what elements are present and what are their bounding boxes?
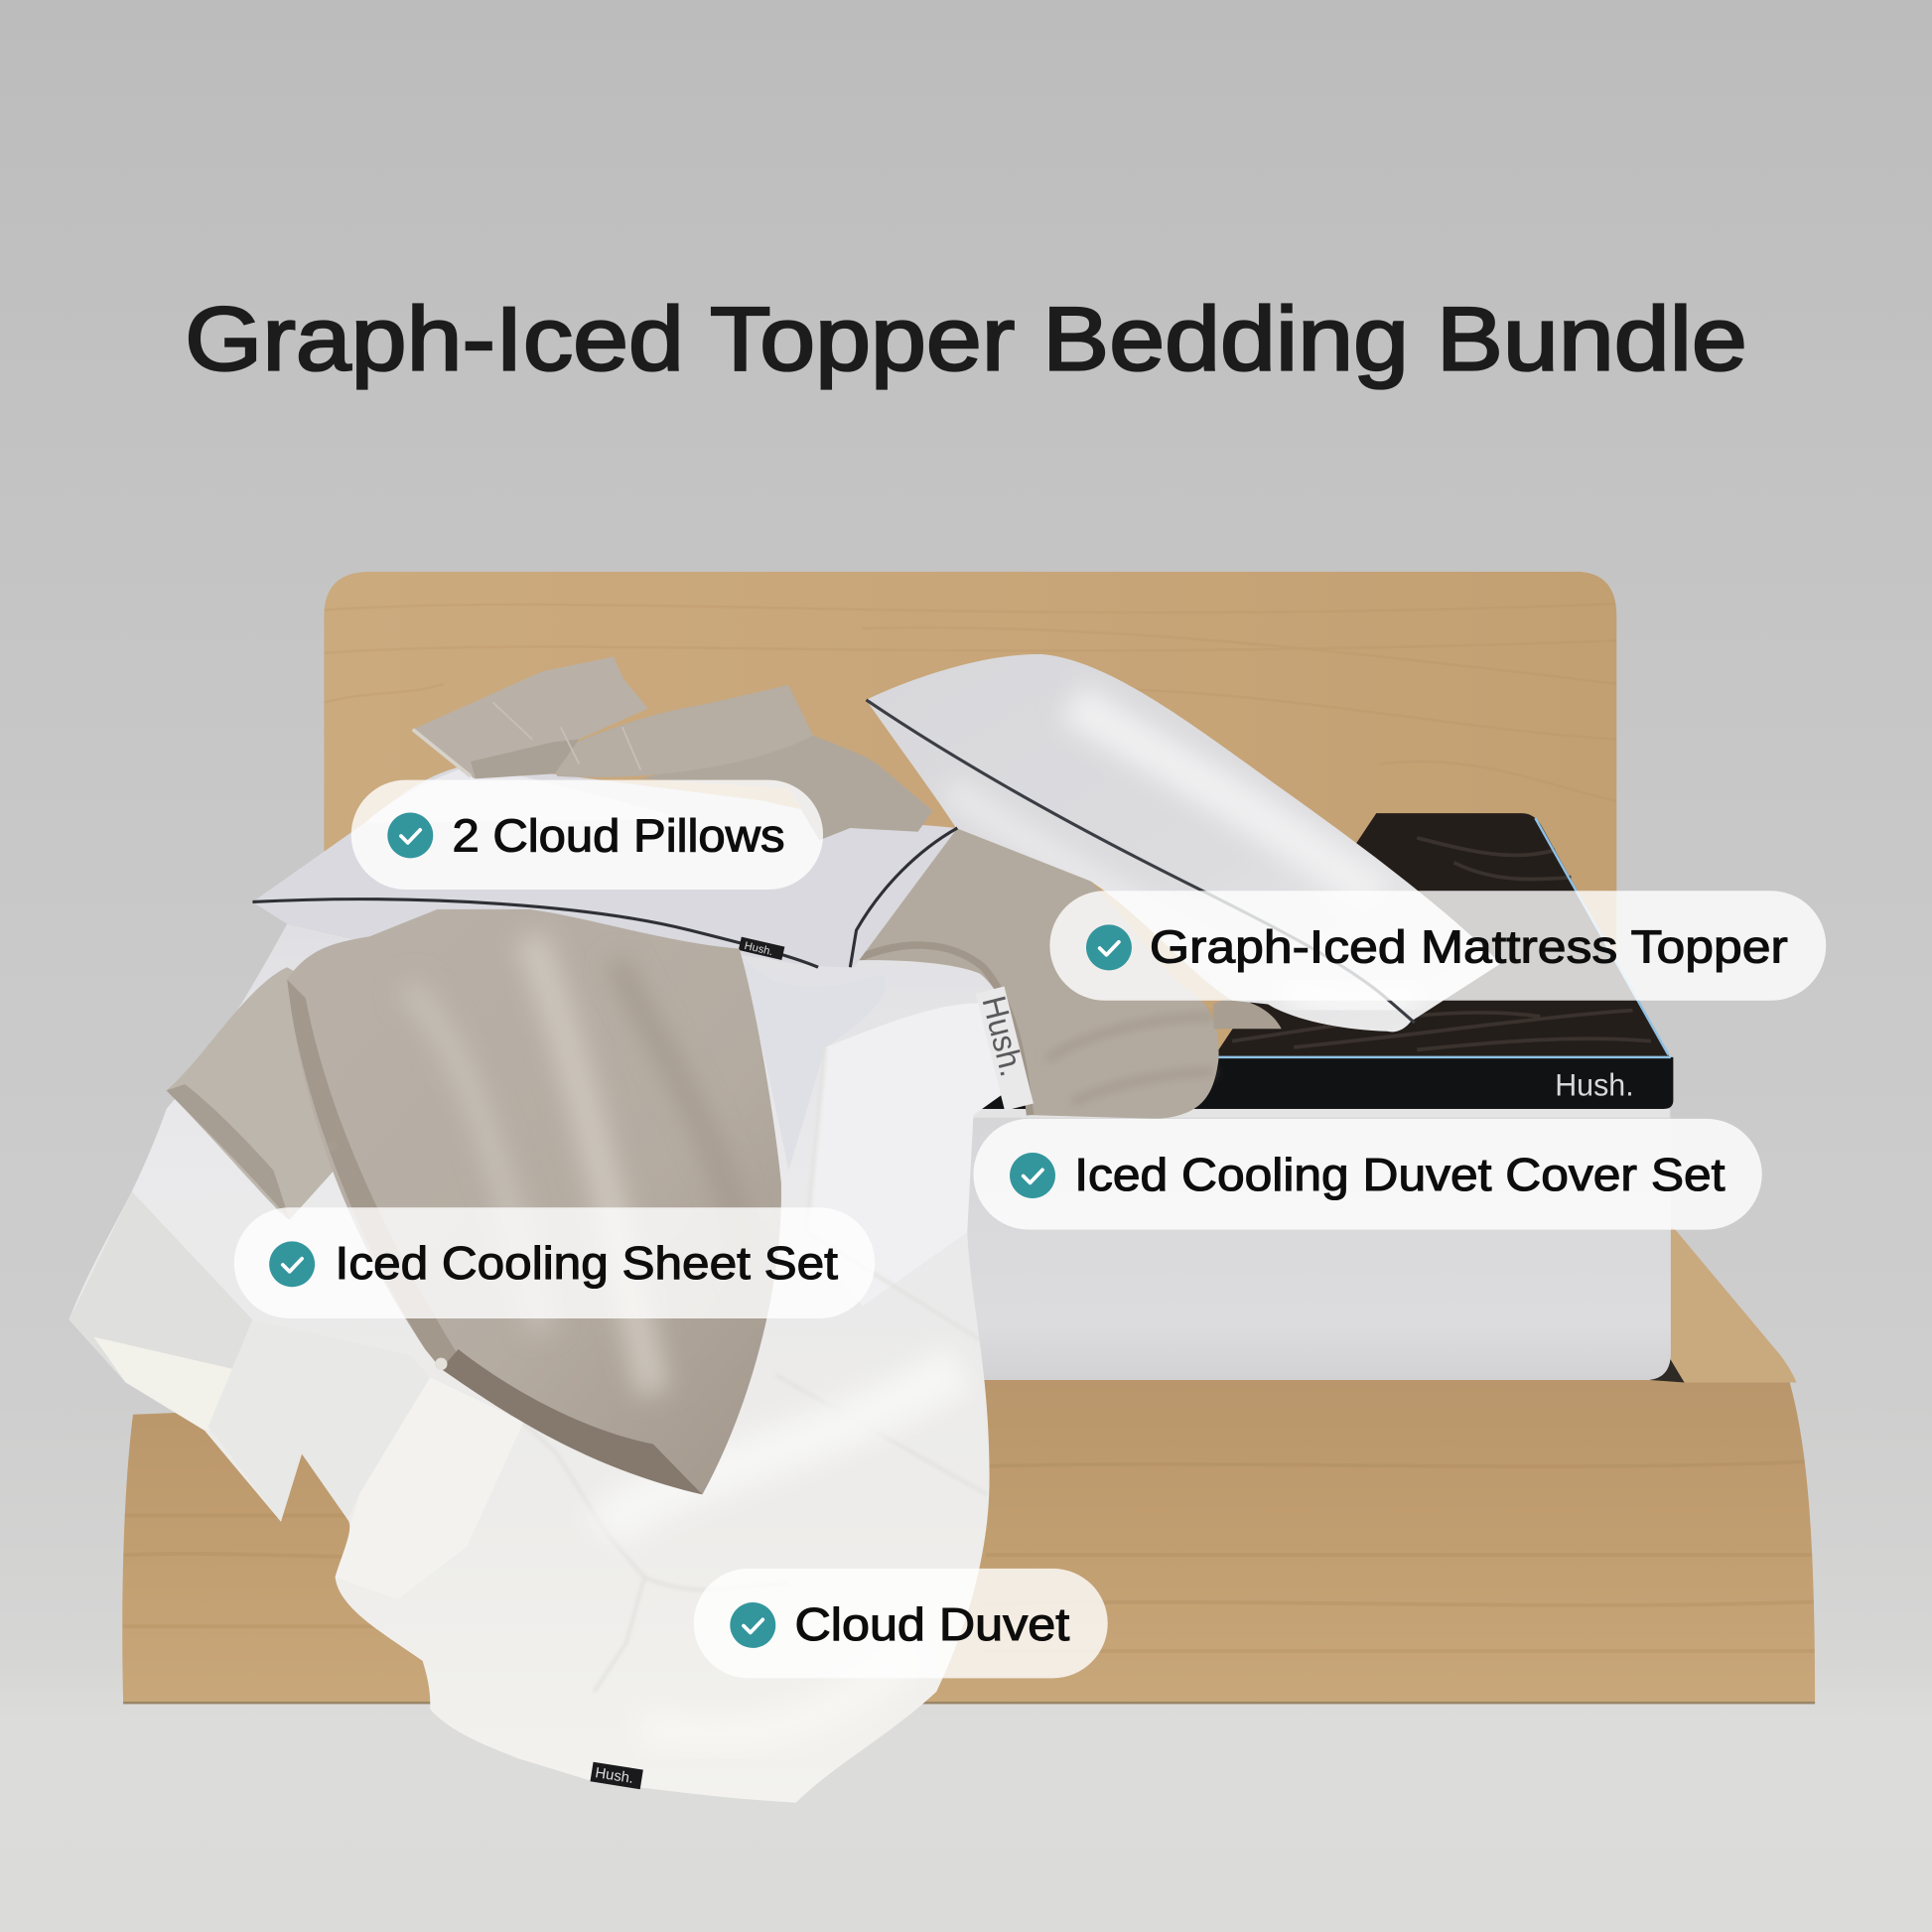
fitted sheet label tag (973, 985, 1037, 1111)
callout: 2 Cloud Pillows: 2 Cloud Pillows (452, 810, 785, 862)
pillow tag (739, 937, 784, 960)
icon: check badge (387, 812, 433, 858)
mattress topper (967, 813, 1673, 1118)
fitted sheet label tag: Hush. (974, 993, 1030, 1080)
callout: Iced Cooling Duvet Cover Set (973, 1119, 1762, 1230)
icon: check badge (1010, 1153, 1055, 1198)
fitted sheet (853, 828, 1282, 1119)
topper logo: Hush. (1555, 1067, 1634, 1102)
draped sheet over left pillow (640, 736, 932, 840)
callout: Cloud Duvet (694, 1569, 1108, 1678)
callout: Graph-Iced Mattress Topper: Graph-Iced Mattress Topper (1150, 920, 1788, 972)
folded pillowcases (413, 656, 813, 778)
icon: check badge (269, 1241, 315, 1287)
pillow tag: Hush. (744, 940, 774, 958)
callout: Graph-Iced Mattress Topper (1049, 891, 1826, 1001)
callout: Cloud Duvet: Cloud Duvet (794, 1598, 1070, 1650)
callout: Iced Cooling Sheet Set: Iced Cooling Sheet Set (336, 1237, 838, 1289)
top sheet (167, 909, 781, 1494)
right pillow (866, 654, 1501, 1032)
callout: 2 Cloud Pillows (351, 780, 823, 890)
cloud duvet (69, 924, 1019, 1803)
callout: Iced Cooling Duvet Cover Set: Iced Cooling Duvet Cover Set (1074, 1149, 1725, 1200)
duvet tag (590, 1762, 643, 1789)
callout: Iced Cooling Sheet Set (234, 1207, 875, 1318)
icon: check badge (1086, 924, 1132, 970)
title: Graph-Iced Topper Bedding Bundle (185, 289, 1747, 389)
left pillow (252, 763, 957, 967)
duvet tag: Hush. (594, 1765, 634, 1787)
headboard (324, 572, 1616, 1050)
icon: check badge (730, 1602, 775, 1648)
mattress with white fitted sheet (961, 1109, 1671, 1380)
bed base (122, 1227, 1815, 1704)
